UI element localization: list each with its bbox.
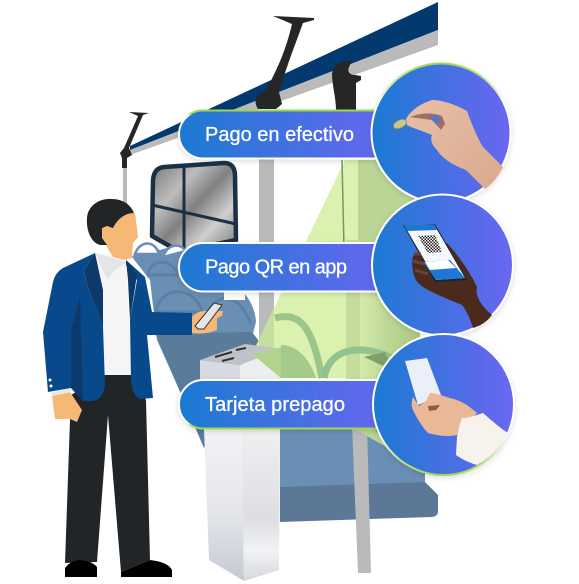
payment kiosk <box>200 344 282 581</box>
trousers <box>65 375 150 572</box>
label: Tarjeta prepago <box>179 380 399 428</box>
icon: phone with QR code <box>403 224 467 282</box>
icon: hand <box>412 393 477 436</box>
circle: prepaid card payment <box>373 334 514 475</box>
circle: cash payment <box>372 64 510 202</box>
bus roof band <box>130 2 438 155</box>
shirt <box>95 253 132 375</box>
lower pole <box>352 425 371 573</box>
icon: large strap handle <box>256 16 314 109</box>
icon: hand holding coin <box>406 100 503 189</box>
person: passenger holding phone <box>43 199 223 577</box>
icon: coin <box>392 117 408 131</box>
phone <box>195 303 222 329</box>
front bus seat <box>280 425 438 522</box>
left hand <box>52 392 82 422</box>
label: Pago QR en app: Pago QR en app <box>205 256 347 278</box>
hair <box>87 199 134 245</box>
right hand <box>192 311 223 334</box>
icon: rail handle <box>332 61 361 110</box>
vertical pole <box>259 158 274 348</box>
green scan beam <box>252 160 430 448</box>
rear bus seats <box>132 244 262 448</box>
icon: dark hand <box>412 243 492 328</box>
label: Pago en efectivo <box>179 110 399 158</box>
head <box>102 212 138 260</box>
jacket <box>43 253 192 401</box>
label: Tarjeta prepago: Tarjeta prepago <box>205 394 345 416</box>
shirt cuff and buttons <box>51 388 71 396</box>
icon: card <box>405 358 441 405</box>
icon: sleeve <box>456 413 508 465</box>
label: Pago en efectivo: Pago en efectivo <box>205 124 354 146</box>
shoes <box>65 560 172 577</box>
beam prism on kiosk <box>252 347 281 378</box>
circle: QR payment <box>372 194 513 336</box>
bus window <box>152 163 236 252</box>
icon: small strap handle <box>120 112 149 210</box>
label: Pago QR en app <box>179 243 399 292</box>
